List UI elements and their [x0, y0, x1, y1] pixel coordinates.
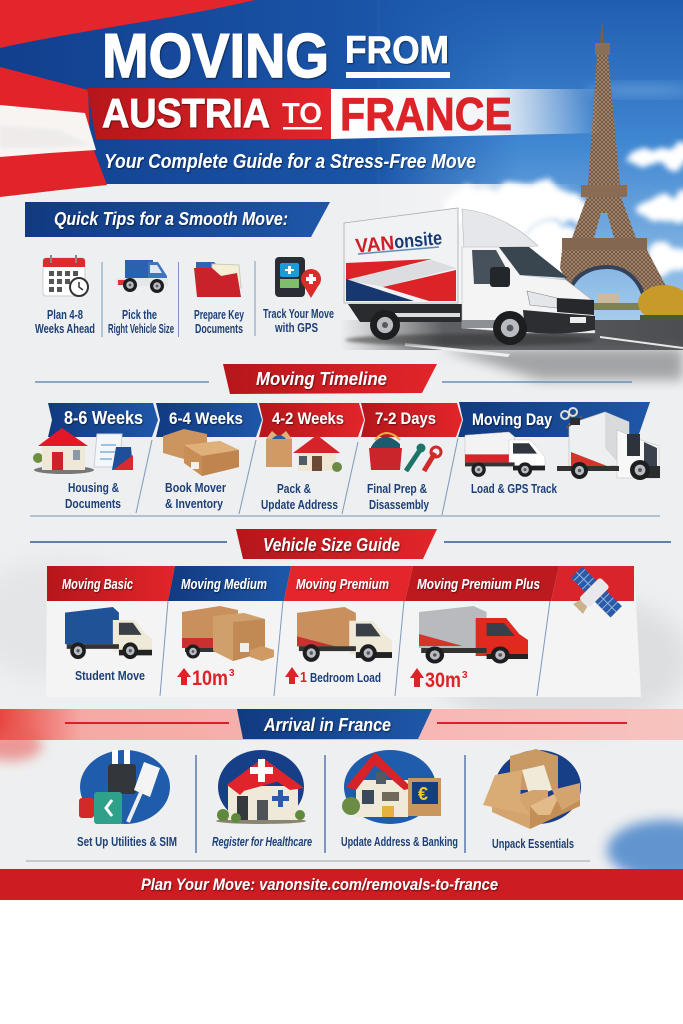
- icon: house and clipboard: [33, 428, 133, 474]
- label: housing: Housing &: [68, 480, 119, 495]
- truck cargo box: [344, 208, 458, 303]
- flag: Austria: [0, 67, 107, 197]
- icon: blue truck: [65, 607, 152, 659]
- section: vehicle size guide: [30, 529, 671, 700]
- label: load and GPS track: Load & GPS Track: [471, 481, 558, 496]
- logo: VANonsite: VAN: [354, 232, 395, 258]
- label: book mover: [165, 480, 226, 511]
- tier: moving premium plus: Moving Premium Plus: [417, 576, 540, 593]
- label: pack: Update Address: [261, 497, 338, 512]
- icon: utilities plugs: [79, 750, 170, 824]
- label: unpack essentials: Unpack Essentials: [492, 836, 574, 851]
- label: vehicle: [108, 307, 174, 336]
- road: [340, 320, 683, 380]
- sky and clouds: [0, 0, 683, 334]
- title: Austria: AUSTRIA: [102, 90, 270, 136]
- heading: vehicle size guide: [236, 529, 437, 559]
- icon: Eiffel Tower: [560, 23, 667, 310]
- tier: moving premium plus: [405, 566, 559, 601]
- footer call to action: Plan Your Move: vanonsite.com/removals-to-france: [141, 875, 498, 894]
- icon: blue truck: [116, 260, 168, 293]
- label: 1 bedroom load: [285, 667, 381, 686]
- heading: quick tips: [25, 202, 330, 237]
- heading: arrival in France: [237, 709, 432, 739]
- icon: large white truck: [557, 412, 660, 480]
- tier: moving basic: Moving Basic: [62, 576, 133, 593]
- trees: [638, 285, 683, 321]
- section: timeline: [30, 364, 660, 516]
- label: GPS: [263, 306, 334, 335]
- label: plan: [35, 307, 95, 336]
- label: pack: [261, 481, 338, 512]
- label: documents: Prepare Key: [194, 307, 245, 322]
- subtitle: Your Complete Guide for a Stress-Free Move: [104, 151, 476, 173]
- label: 30 m3: [410, 668, 468, 692]
- label: vehicle: Right Vehicle Size: [108, 321, 174, 336]
- truck cab: [462, 209, 595, 334]
- label: book mover: Book Mover: [165, 480, 226, 495]
- icon: GPS phone and pin: [275, 257, 321, 298]
- icon: house and bank: [342, 750, 441, 824]
- label: pack: Pack &: [277, 481, 311, 496]
- tier: moving basic: [47, 566, 175, 601]
- title: white band for France: [331, 89, 600, 139]
- tier: moving premium: [284, 566, 413, 601]
- label: final prep: Disassembly: [369, 497, 430, 512]
- label: 10 m3: 3: [229, 668, 235, 679]
- icon: house and bank: €: [418, 784, 428, 804]
- icon: VANonsite truck: [344, 208, 595, 346]
- label: documents: [194, 307, 245, 336]
- label: 10 m3: 10m: [192, 667, 228, 690]
- heading: arrival in France: Arrival in France: [263, 715, 391, 735]
- heading: quick tips: Quick Tips for a Smooth Move:: [54, 209, 288, 229]
- label: plan: Plan 4-8: [47, 307, 83, 322]
- label: plan: Weeks Ahead: [35, 321, 95, 336]
- panel: size table: [46, 563, 641, 700]
- label: healthcare: Register for Healthcare: [212, 834, 312, 849]
- icon: box and house: [266, 431, 342, 472]
- chevron: 4-2 weeks: 4-2 Weeks: [272, 409, 344, 428]
- chevron: 6-4 weeks: 6-4 Weeks: [169, 409, 243, 428]
- label: address and banking: Update Address & Banking: [341, 834, 458, 849]
- title: red band for Austria: [87, 88, 331, 139]
- logo: VANonsite: [354, 228, 443, 258]
- title: France: FRANCE: [340, 88, 512, 140]
- label: GPS: Track Your Move: [263, 306, 334, 321]
- icon: calendar: [43, 255, 88, 296]
- label: final prep: [367, 481, 430, 512]
- label: final prep: Final Prep &: [367, 481, 427, 496]
- label: housing: [65, 480, 121, 511]
- tier: moving premium: Moving Premium: [296, 576, 389, 593]
- label: 30 m3: 30m: [425, 669, 461, 692]
- icon: healthcare house: [216, 750, 306, 824]
- chevron: 8-6 weeks: [48, 403, 158, 437]
- chevron: 7-2 days: [361, 403, 462, 437]
- title: Moving: MOVING: [102, 22, 329, 91]
- label: GPS: with GPS: [274, 320, 318, 335]
- truck wheels: [370, 310, 527, 345]
- label: housing: Documents: [65, 496, 121, 511]
- footer call to action: [0, 869, 683, 900]
- chevron: 7-2 days: 7-2 Days: [375, 409, 436, 428]
- icon: cardboard boxes: [163, 429, 239, 476]
- heading: moving timeline: Moving Timeline: [256, 369, 387, 389]
- tier: moving medium: Moving Medium: [181, 576, 267, 593]
- chevron: 8-6 weeks: 8-6 Weeks: [64, 408, 143, 428]
- icon: drone: [561, 408, 582, 428]
- label: utilities: Set Up Utilities & SIM: [77, 834, 177, 849]
- logo: VANonsite: onsite: [393, 228, 443, 253]
- tier: empty red cell: [551, 566, 634, 601]
- chevron: 4-2 weeks: [259, 403, 364, 437]
- icon: small white truck: [465, 432, 545, 477]
- icon: open box: [483, 749, 581, 829]
- title: To: TO: [282, 98, 322, 130]
- label: 1 bedroom load: 1: [300, 669, 307, 686]
- flag: top left red ribbon: [0, 0, 255, 48]
- chevron: moving day: Moving Day: [472, 410, 552, 429]
- red wash band: [0, 709, 683, 880]
- icon: truck with boxes: [182, 606, 274, 661]
- label: 30 m3: 3: [462, 670, 468, 681]
- panel: quick tips: [25, 202, 334, 337]
- icon: satellite: [559, 563, 625, 629]
- heading: moving timeline: [223, 364, 437, 394]
- truck chassis: [348, 304, 470, 322]
- heading: vehicle size guide: Vehicle Size Guide: [263, 535, 400, 555]
- icon: tan truck: [297, 607, 392, 662]
- label: book mover: & Inventory: [165, 496, 224, 511]
- label: student move: Student Move: [75, 668, 145, 683]
- section: arrival in France: [0, 709, 683, 880]
- icon: folder: [194, 262, 241, 297]
- title: [87, 22, 600, 173]
- label: documents: Documents: [195, 321, 243, 336]
- tier: moving medium: [168, 566, 291, 601]
- icon: red truck: [419, 606, 528, 664]
- icon: toolbox and wrenches: [369, 433, 441, 471]
- chevron: moving day: [458, 402, 650, 437]
- chevron: 6-4 weeks: [156, 403, 262, 437]
- label: vehicle: Pick the: [122, 307, 157, 322]
- label: 1 bedroom load: Bedroom Load: [310, 670, 381, 685]
- title: From: FROM: [345, 29, 449, 72]
